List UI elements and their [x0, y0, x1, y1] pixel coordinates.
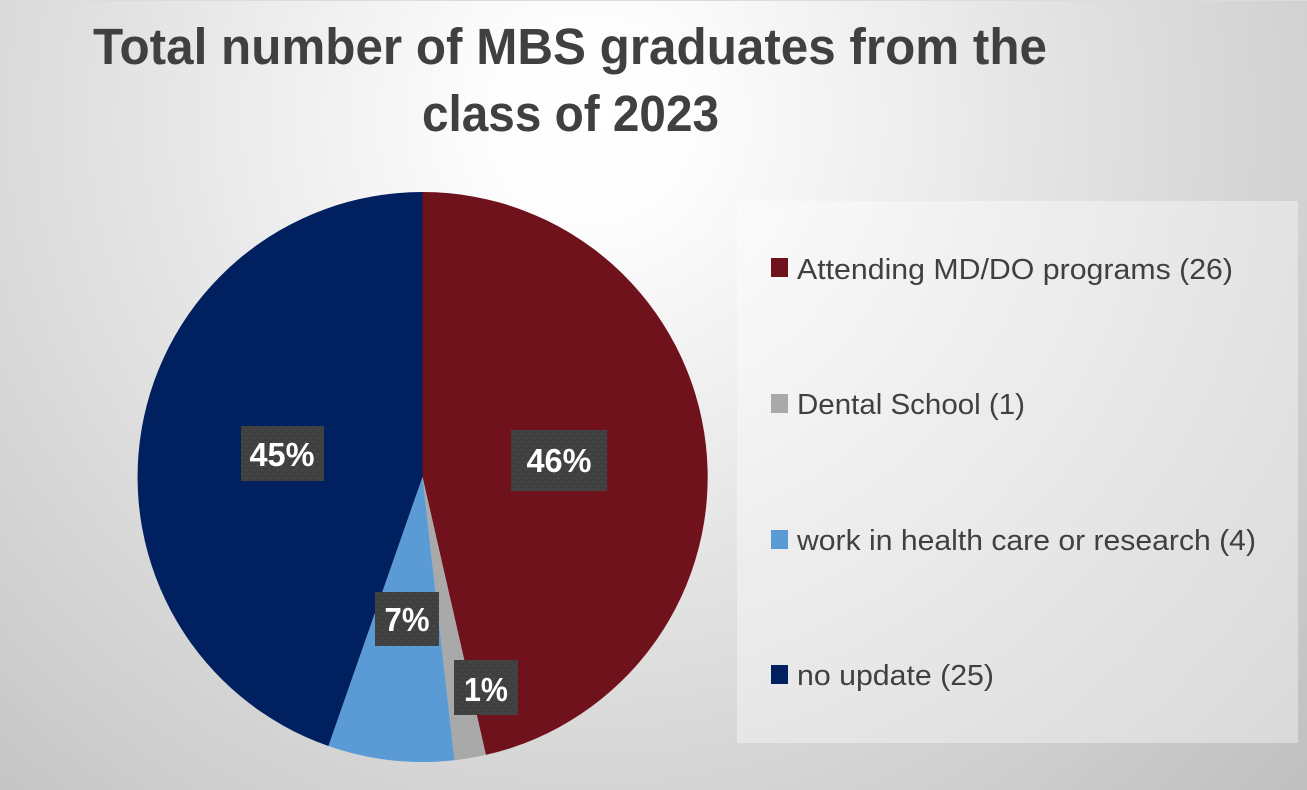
title: Total number of MBS graduates from the — [93, 18, 1047, 75]
title — [93, 18, 1047, 142]
data label: 1%: 1% — [464, 671, 508, 708]
pie chart — [138, 192, 708, 762]
slice: Dental School 1% — [422, 477, 486, 760]
legend item: no update: no update (25) — [797, 660, 994, 692]
data label: 46%: 46% — [526, 442, 592, 479]
slice: no update 45% — [138, 192, 422, 746]
slice: work in health care or research 7% — [328, 477, 454, 762]
legend item: work in health care or research: work in health care or research (4) — [796, 525, 1256, 557]
title: class of 2023 — [422, 85, 719, 142]
data label: 1% — [454, 660, 518, 715]
data label: 46% — [511, 430, 607, 491]
slice: Attending MD/DO programs 46% — [422, 192, 708, 755]
data label: 7%: 7% — [384, 601, 430, 638]
legend item: Dental School: Dental School (1) — [797, 389, 1025, 421]
data label: 45% — [241, 426, 324, 481]
legend panel — [737, 201, 1298, 743]
data label: 45%: 45% — [250, 436, 314, 473]
data label: 7% — [375, 592, 439, 646]
legend item: Attending MD/DO programs: Attending MD/DO programs (26) — [797, 254, 1233, 286]
